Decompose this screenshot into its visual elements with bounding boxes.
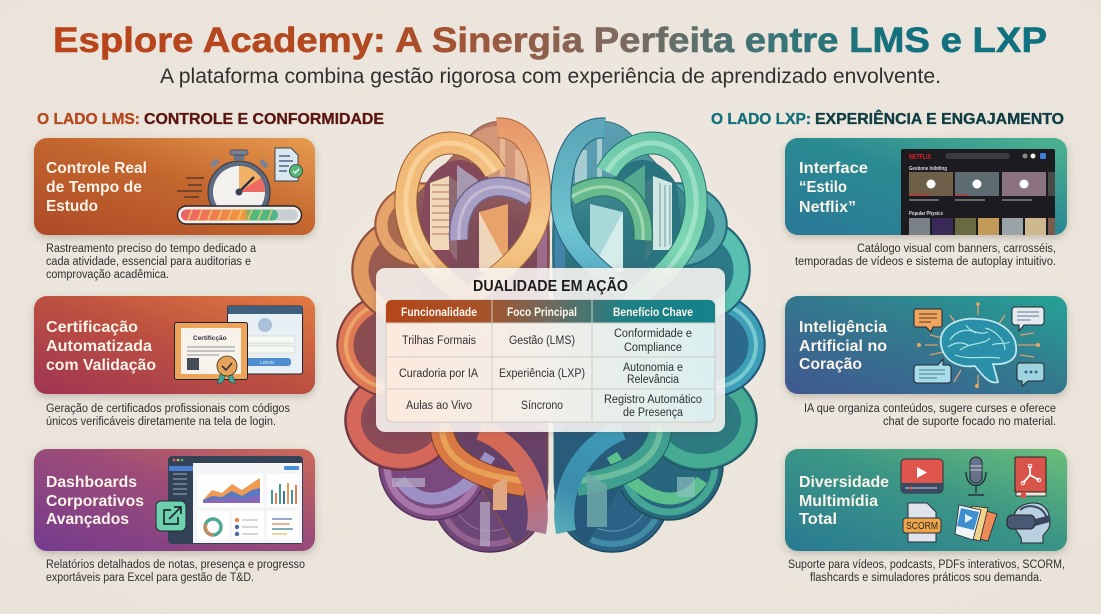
- description: [46, 403, 290, 428]
- card title: Coração: [799, 356, 862, 373]
- row: Trilhas Formais: [402, 328, 692, 354]
- row: Curadoria por IA: Relevância: [627, 374, 680, 386]
- heading: LXP side: [711, 109, 1064, 128]
- card title: Automatizada: [46, 338, 152, 355]
- description: Catálogo visual com banners, carrosséis,: [857, 243, 1056, 255]
- card title: Controle Real: [46, 160, 147, 177]
- icon: login window: [228, 306, 302, 374]
- header labels: Benefício Chave: [613, 307, 693, 319]
- icon: SCORM file: SCORM: [906, 521, 938, 532]
- panel: Diversidade Multimídia: [785, 449, 1067, 551]
- card title: de Tempo de: [46, 179, 142, 196]
- chart: dashboard window: [168, 456, 303, 544]
- panel: Controle Real: [34, 138, 315, 235]
- card title: “Estilo: [799, 179, 847, 196]
- header labels: Foco Principal: [507, 307, 577, 319]
- icon: document with check: [275, 148, 302, 181]
- icon: certificate: Certificção: [193, 335, 227, 342]
- illustration: brain left hemisphere: [337, 121, 549, 552]
- card title: Netflix”: [799, 199, 856, 216]
- description: IA que organiza conteúdos, sugere curses e oferece: [804, 403, 1056, 415]
- description: flashcards e simuladores práticos sou demanda.: [810, 572, 1042, 584]
- panel: Interface Netflix: [785, 138, 1067, 235]
- illustration: streaming interface: Popular Physics: [909, 211, 943, 217]
- description: chat de suporte focado no material.: [883, 416, 1056, 428]
- card title: [799, 319, 887, 373]
- description: cada atividade, essencial para auditorias e: [46, 256, 251, 268]
- row: Aulas ao Vivo: Aulas ao Vivo: [406, 400, 472, 412]
- illustration: streaming interface: Gestione Inibiting: [909, 166, 947, 172]
- table title: DUALIDADE EM AÇÃO: [473, 275, 628, 295]
- icon: flashcards: [955, 505, 997, 541]
- illustration: streaming interface: NETFLIX: [909, 154, 931, 161]
- card title: [799, 160, 868, 216]
- card title: Diversidade: [799, 474, 889, 491]
- heading: LMS side: CONTROLE E CONFORMIDADE: [144, 111, 384, 128]
- table header: [386, 300, 715, 323]
- icon: export: [156, 501, 186, 531]
- heading: LMS side: [37, 111, 384, 128]
- card title: Avançados: [46, 511, 129, 528]
- icon: video player: [901, 459, 943, 493]
- illustration: brain right hemisphere: [553, 121, 765, 552]
- row: Trilhas Formais: Conformidade e: [614, 328, 692, 340]
- row: Aulas ao Vivo: de Presença: [623, 407, 684, 419]
- card title: Dashboards: [46, 474, 137, 491]
- icon: microphone: [966, 457, 986, 495]
- card title: [46, 474, 144, 528]
- description: [795, 243, 1056, 268]
- description: [46, 243, 257, 281]
- description: [788, 559, 1065, 584]
- row: Trilhas Formais: Compliance: [624, 342, 682, 354]
- row: Aulas ao Vivo: [406, 394, 702, 419]
- table body: [386, 300, 715, 422]
- row: Curadoria por IA: Curadoria por IA: [399, 368, 478, 380]
- icon: VR headset: [1007, 503, 1050, 543]
- icon: login window: LOGIN: [260, 360, 274, 365]
- card title: Multimídia: [799, 493, 878, 510]
- building shapes: [590, 165, 672, 272]
- description: únicos verificáveis diretamente na tela de login.: [46, 416, 276, 428]
- description: Geração de certificados profissionais com códigos: [46, 403, 290, 415]
- card title: Certificação: [46, 319, 138, 336]
- title: Esplore Academy: A Sinergia Perfeita entre LMS e LXP: [53, 21, 1047, 60]
- description: exportáveis para Excel para gestão de T&D.: [46, 572, 254, 584]
- description: Relatórios detalhados de notas, presença e progresso: [46, 559, 305, 571]
- icon: SCORM file: [903, 503, 941, 542]
- illustration: streaming interface: [901, 149, 1055, 235]
- panel: Dashboards: [34, 449, 315, 551]
- card title: [46, 160, 147, 215]
- heading: LXP side: O LADO LXP:: [711, 111, 811, 128]
- row: Curadoria por IA: Experiência (LXP): [499, 368, 585, 380]
- header labels: Funcionalidade: [401, 307, 477, 319]
- card title: Interface: [799, 160, 868, 177]
- card title: Inteligência: [799, 319, 887, 336]
- description: comprovação acadêmica.: [46, 269, 169, 281]
- ribbon bands: [560, 128, 702, 532]
- icon: stopwatch with progress bar: [177, 150, 302, 224]
- description: Rastreamento preciso do tempo dedicado a: [46, 243, 257, 255]
- heading: LXP side: EXPERIÊNCIA E ENGAJAMENTO: [815, 109, 1064, 128]
- card title: [46, 319, 156, 374]
- icon: certificate: [174, 322, 248, 384]
- card title: Corporativos: [46, 493, 144, 510]
- description: Suporte para vídeos, podcasts, PDFs interativos, SCORM,: [788, 559, 1065, 571]
- row: Curadoria por IA: Autonomia e: [623, 362, 683, 374]
- panel: Certificação: [34, 296, 315, 394]
- header labels: [401, 307, 693, 319]
- panel: Inteligência Artificial: [785, 296, 1067, 394]
- description: [46, 559, 305, 584]
- row: Curadoria por IA: [399, 362, 683, 386]
- card title: [799, 474, 889, 528]
- ribbon bands: [400, 128, 542, 532]
- card title: Artificial no: [799, 338, 887, 355]
- row: Aulas ao Vivo: Registro Automático: [604, 394, 702, 406]
- subtitle: A plataforma combina gestão rigorosa com experiência de aprendizado envolvente.: [160, 65, 941, 88]
- heading: LMS side: O LADO LMS:: [37, 111, 140, 128]
- description: temporadas de vídeos e sistema de autoplay intuitivo.: [795, 256, 1056, 268]
- icon: AI brain with rays: [917, 302, 1040, 388]
- card title: com Validação: [46, 357, 156, 374]
- description: [804, 403, 1056, 428]
- card title: Estudo: [46, 198, 98, 215]
- building shapes: [430, 165, 510, 272]
- card title: Total: [799, 511, 837, 528]
- icon: chat bubbles: [914, 307, 1044, 386]
- row: Trilhas Formais: Gestão (LMS): [509, 335, 575, 347]
- row: Aulas ao Vivo: Síncrono: [521, 400, 563, 412]
- panel: comparison table: [376, 268, 725, 432]
- icon: PDF book: [1015, 457, 1046, 498]
- row: Trilhas Formais: Trilhas Formais: [402, 335, 476, 347]
